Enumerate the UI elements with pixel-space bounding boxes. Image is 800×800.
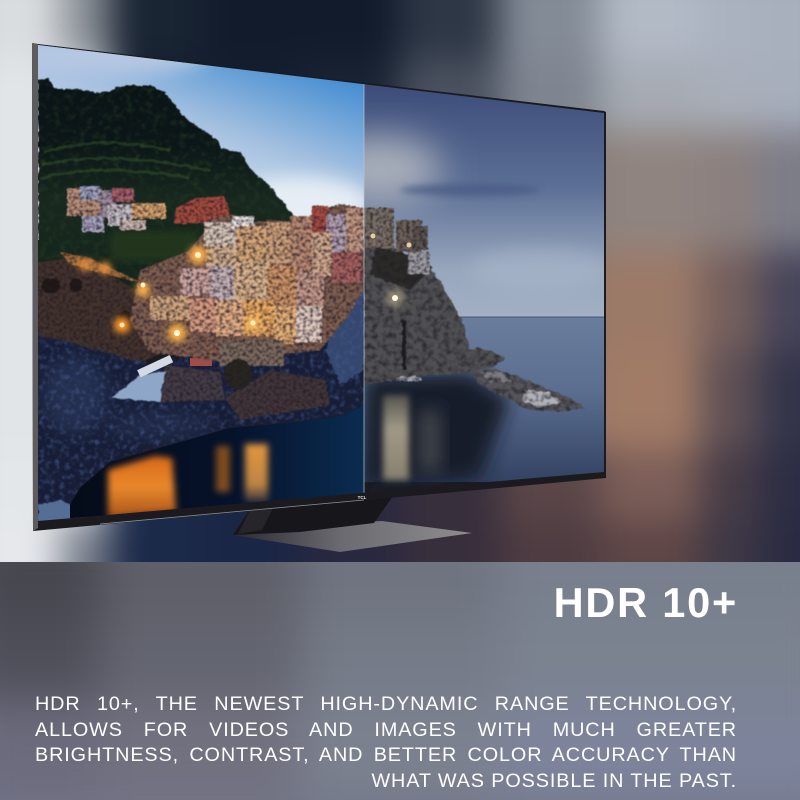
heading: HDR 10+ bbox=[554, 579, 738, 626]
description text: BRIGHTNESS, CONTRAST, AND BETTER COLOR ACCURACY THAN bbox=[35, 744, 737, 766]
hillside houses bbox=[67, 186, 230, 232]
dark foreground water bbox=[364, 372, 510, 490]
background: lower panel bbox=[0, 562, 800, 800]
TV screen image bbox=[38, 45, 604, 521]
description text: HDR 10+, THE NEWEST HIGH-DYNAMIC RANGE TECHNOLOGY, bbox=[35, 693, 737, 715]
stone wall and arches bbox=[38, 252, 160, 362]
blue shoreline rocks bbox=[38, 270, 364, 525]
description text bbox=[35, 693, 737, 792]
TV frame bbox=[32, 43, 606, 531]
standard half of the picture bbox=[364, 84, 604, 491]
TCL logo: TCL bbox=[358, 495, 367, 500]
description text: WHAT WAS POSSIBLE IN THE PAST. bbox=[371, 770, 737, 792]
green hillside bbox=[38, 78, 300, 300]
cliff-top buildings bbox=[364, 208, 430, 274]
right sky bbox=[364, 80, 606, 318]
headland cliff bbox=[364, 242, 505, 385]
background: upper panel bbox=[0, 0, 800, 562]
split divider line bbox=[364, 84, 365, 493]
left water with reflections bbox=[70, 405, 364, 530]
left sky bbox=[38, 40, 364, 240]
village lights bbox=[79, 246, 260, 342]
enhanced half of the picture bbox=[38, 45, 364, 521]
sea bbox=[364, 317, 606, 482]
description text: ALLOWS FOR VIDEOS AND IMAGES WITH MUCH GREATER bbox=[35, 718, 737, 740]
rock jetty bbox=[397, 368, 585, 412]
cliff lamps bbox=[370, 234, 412, 307]
TV stand bbox=[233, 496, 472, 552]
village bbox=[130, 204, 364, 389]
